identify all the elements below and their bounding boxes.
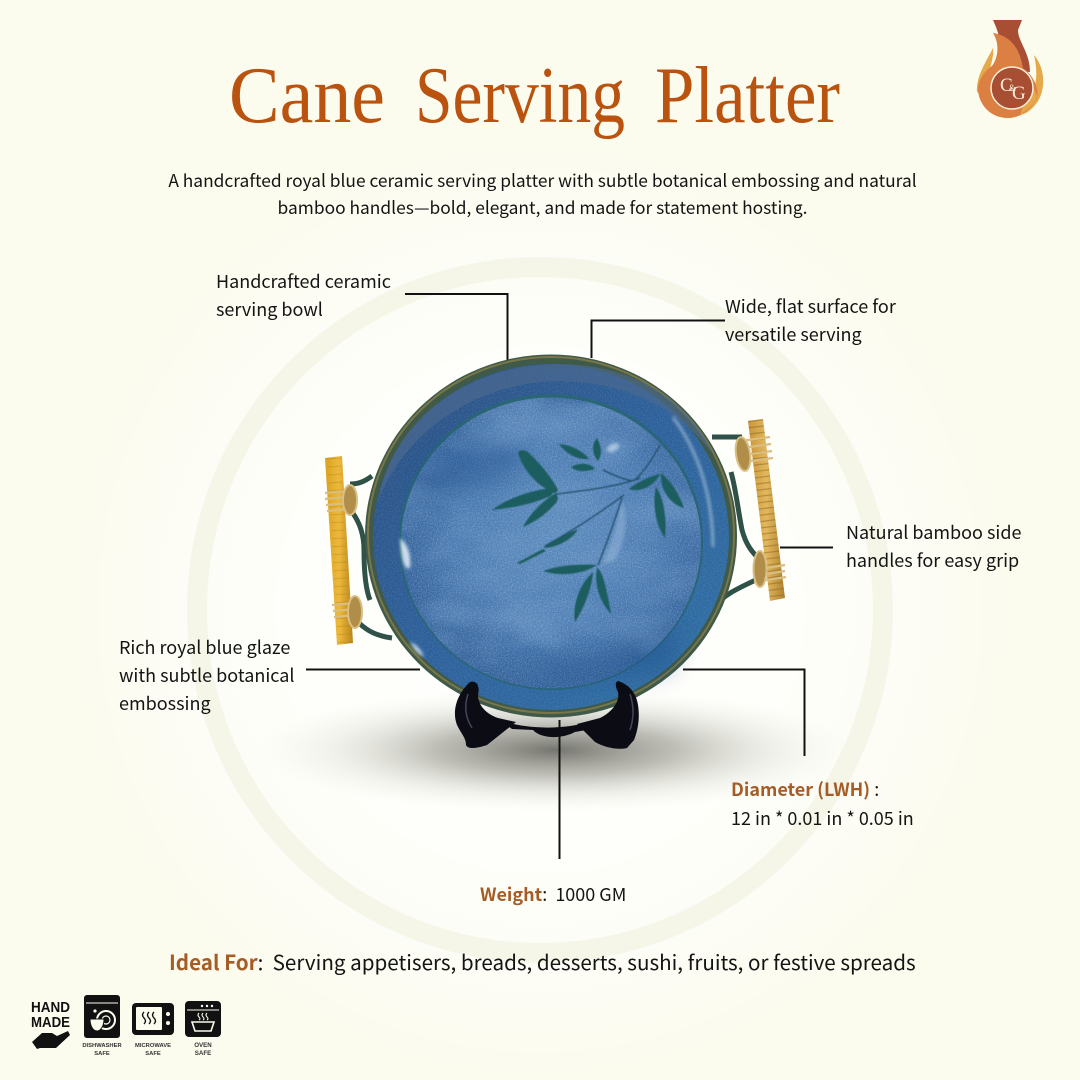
icon: dishwasher safe: SAFE	[94, 1051, 110, 1057]
icon: microwave safe: MICROWAVE	[135, 1043, 171, 1049]
icon: handmade: MADE	[31, 1014, 70, 1031]
bamboo leaves embossing	[492, 438, 684, 622]
callout: bamboo handles: Natural bamboo side	[846, 519, 1021, 545]
right cane handle	[734, 419, 786, 601]
logo: clay pot with flames: &	[1009, 83, 1016, 93]
safety icons	[31, 995, 221, 1057]
leader lines	[306, 294, 833, 859]
callout: flat surface: versatile serving	[725, 321, 862, 347]
callout: ceramic bowl	[216, 268, 391, 322]
callout: bamboo handles: handles for easy grip	[846, 547, 1019, 573]
icon: microwave safe	[132, 1003, 174, 1057]
plate shadow	[255, 688, 855, 812]
plate rim	[365, 354, 737, 718]
icon: handmade	[31, 999, 70, 1049]
black plate stand	[455, 681, 639, 749]
left handle loops	[350, 476, 392, 638]
ideal for line: Ideal For: Serving appetisers, breads, desserts, sushi, fruits, or festive spreads	[169, 946, 916, 976]
logo: clay pot with flames: C	[1000, 75, 1013, 96]
callout: flat surface	[725, 293, 896, 347]
title	[229, 52, 840, 140]
icon: dishwasher safe: DISHWASHER	[82, 1043, 122, 1049]
icon: oven safe: SAFE	[195, 1050, 211, 1057]
title: Cane	[229, 52, 385, 140]
callout: flat surface: Wide, flat surface for	[725, 293, 896, 319]
logo: clay pot with flames: G	[1012, 83, 1026, 104]
subtitle: bamboo handles—bold, elegant, and made for statement hosting.	[278, 194, 807, 218]
callout: royal blue glaze: embossing	[119, 690, 211, 716]
background ring and glow	[70, 140, 1010, 1080]
callout: diameter: 12 in * 0.01 in * 0.05 in	[731, 805, 914, 831]
title: Serving	[415, 52, 625, 140]
icon: dishwasher safe	[82, 995, 122, 1057]
callout: royal blue glaze: Rich royal blue glaze	[119, 634, 290, 660]
plate well	[399, 394, 703, 690]
callout: ceramic bowl: serving bowl	[216, 296, 323, 322]
callout: weight: Weight: 1000 GM	[480, 881, 626, 907]
glaze highlights	[400, 417, 713, 657]
icon: microwave safe: SAFE	[145, 1051, 161, 1057]
icon: oven safe	[185, 1001, 221, 1057]
logo: clay pot with flames	[977, 20, 1043, 118]
right handle loops	[712, 437, 760, 608]
callout: diameter	[731, 776, 914, 831]
icon: handmade: HAND	[31, 999, 70, 1016]
callout: ceramic bowl: Handcrafted ceramic	[216, 268, 391, 294]
subtitle: A handcrafted royal blue ceramic serving platter with subtle botanical embossing and natural	[168, 167, 917, 192]
subtitle	[168, 167, 917, 218]
icon: oven safe: OVEN	[194, 1042, 212, 1049]
callout: royal blue glaze: with subtle botanical	[119, 662, 294, 688]
title: Platter	[655, 52, 840, 140]
callout: royal blue glaze	[119, 634, 294, 716]
left cane handle	[325, 456, 362, 645]
product photo: cane serving platter	[325, 354, 786, 749]
callout: bamboo handles	[846, 519, 1021, 573]
callout: diameter: Diameter (LWH) :	[731, 776, 879, 802]
